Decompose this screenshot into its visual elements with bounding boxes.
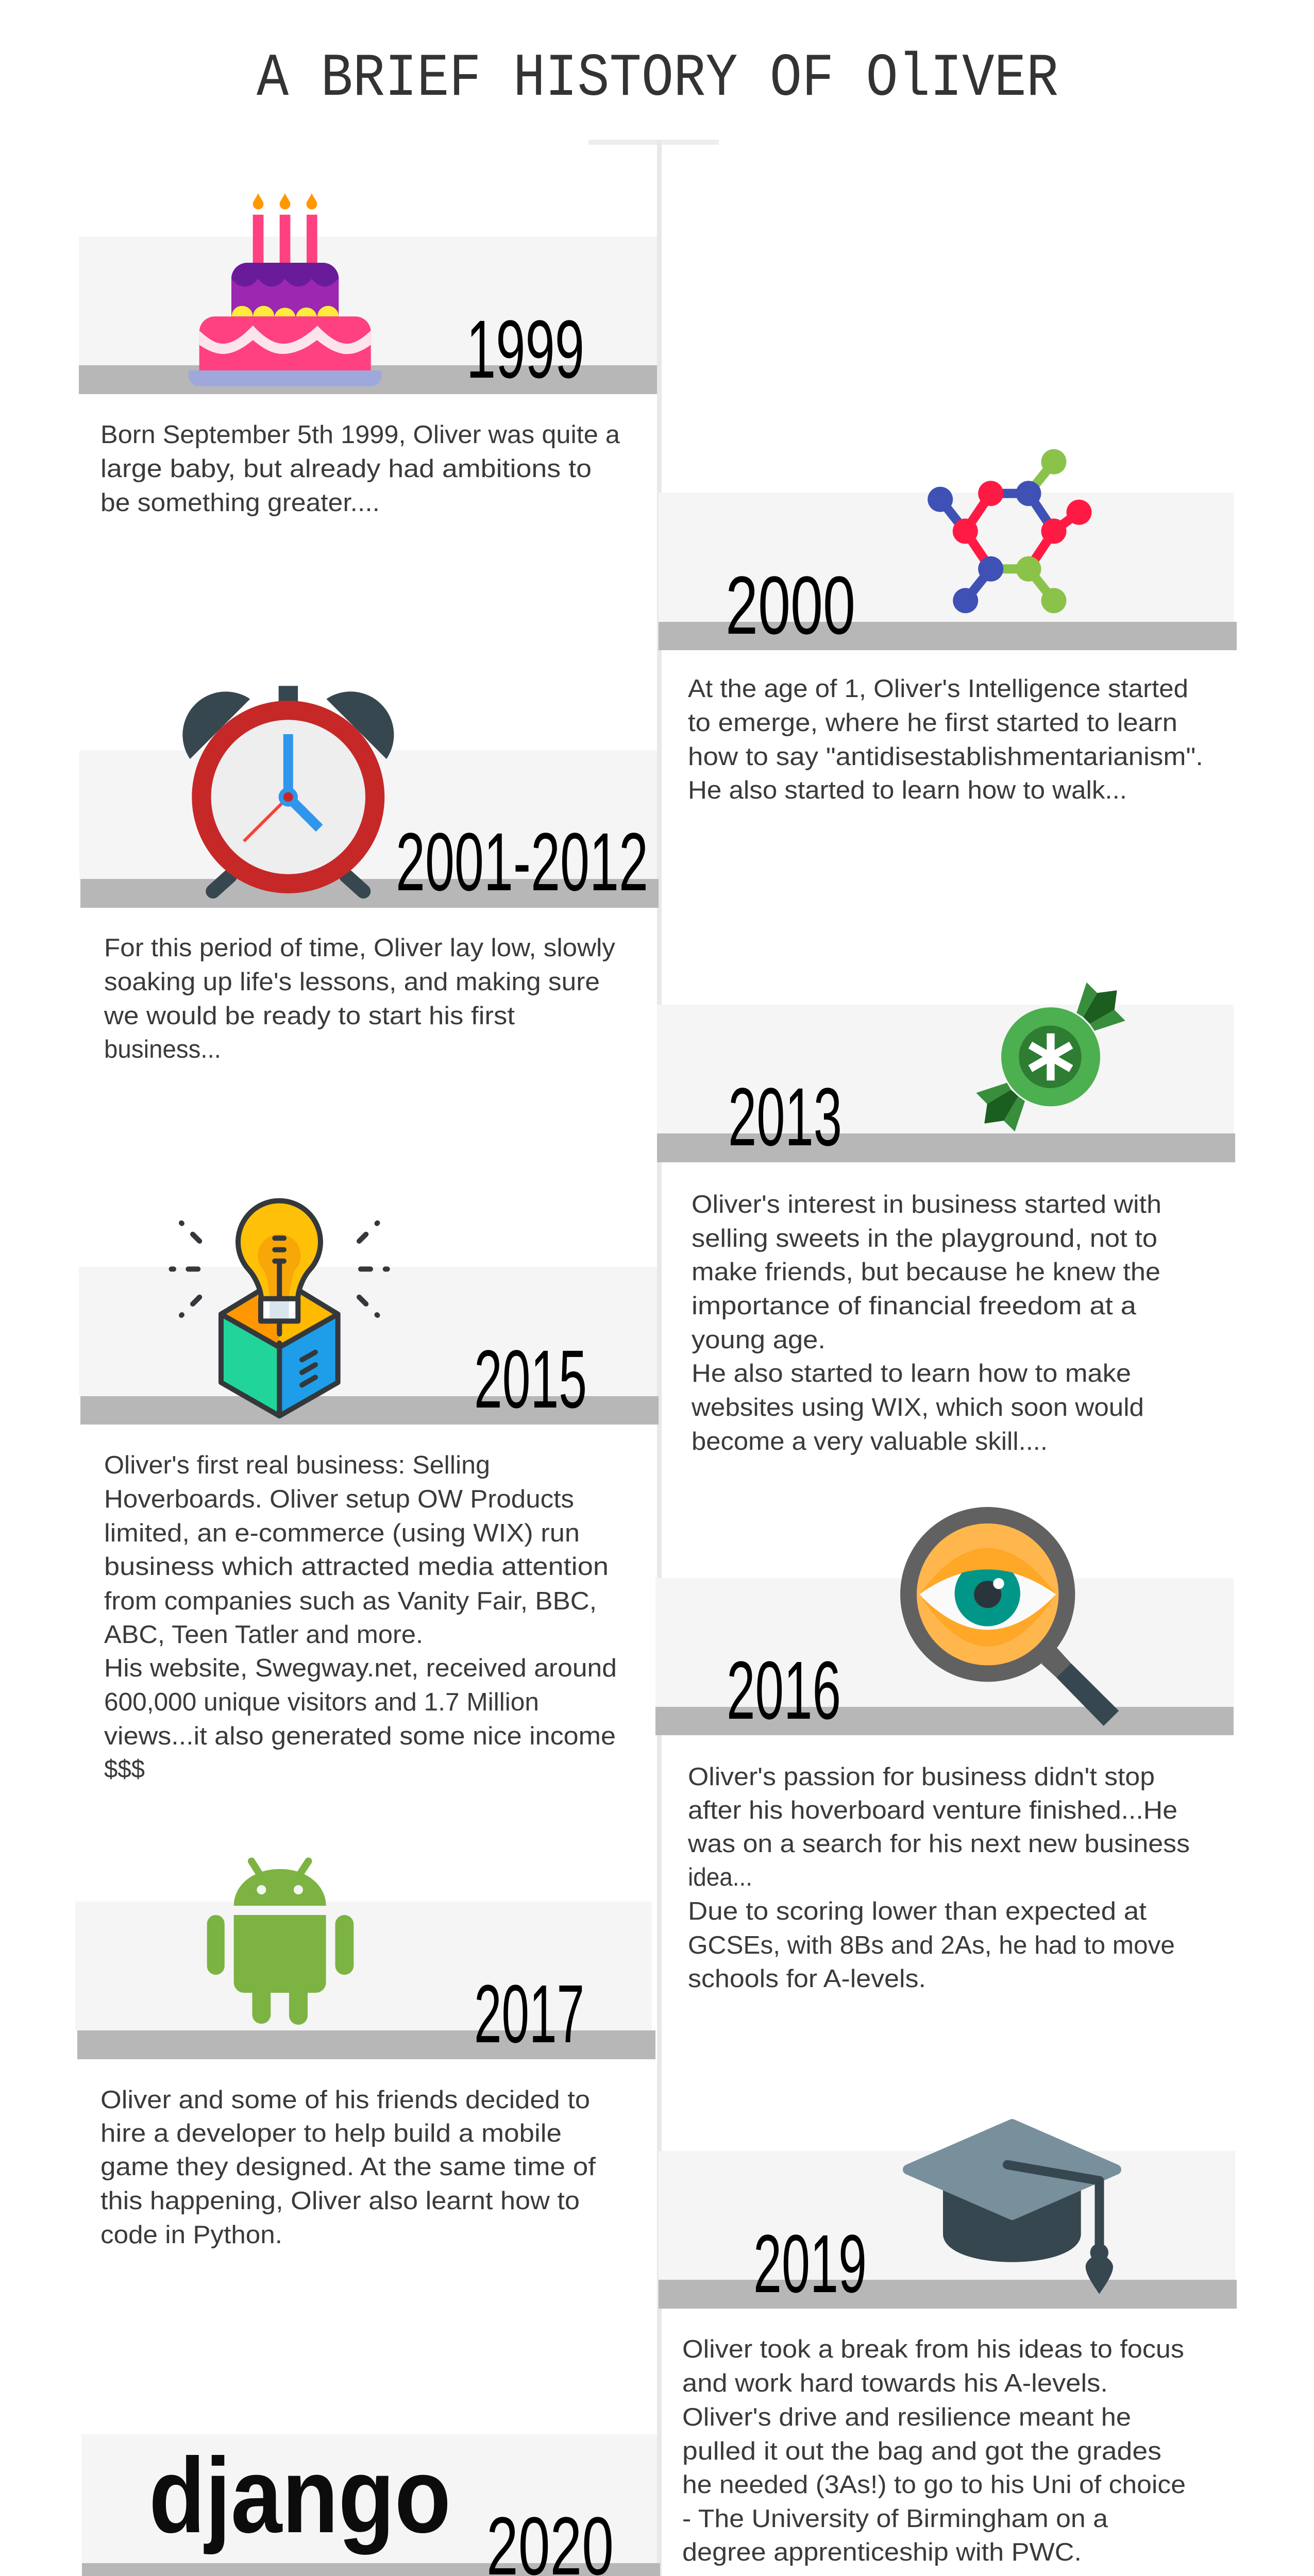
text: 2019: and work hard towards his A-levels. bbox=[682, 2369, 1108, 2397]
text: 2013 bbox=[691, 1191, 1161, 1455]
year: 2015: 2015 bbox=[474, 1333, 587, 1425]
text: 2015: from companies such as Vanity Fair, BBC, bbox=[104, 1587, 597, 1615]
text: 2019: Oliver's drive and resilience meant he bbox=[682, 2403, 1131, 2431]
year: 1999: 1999 bbox=[466, 303, 584, 395]
text: 2001-2012: soaking up life's lessons, and making sure bbox=[104, 968, 600, 996]
icon: graduation cap bbox=[908, 2124, 1116, 2294]
icon: magnifying glass with eye bbox=[900, 1507, 1119, 1726]
icon: light bulb in a box bbox=[171, 1201, 388, 1416]
text: 2015: Oliver's first real business: Selling bbox=[104, 1451, 490, 1479]
text: 2013: young age. bbox=[692, 1326, 826, 1354]
panel: 1999 bbox=[79, 193, 657, 395]
panel: 2017 bbox=[75, 1861, 655, 2060]
text: 2019: he needed (3As!) to go to his Uni of choice bbox=[682, 2471, 1186, 2499]
text: 2017: hire a developer to help build a mobile bbox=[100, 2120, 562, 2147]
text: 2016 bbox=[687, 1763, 1190, 1993]
text: 2019: Oliver took a break from his ideas to focus bbox=[682, 2335, 1184, 2363]
text: 2001-2012: For this period of time, Oliver lay low, slowly bbox=[104, 934, 616, 962]
text: 2000 bbox=[688, 675, 1203, 804]
text: 2019: pulled it out the bag and got the grades bbox=[682, 2437, 1161, 2465]
text: 1999: be something greater.... bbox=[100, 489, 380, 517]
text: 2015: Hoverboards. Oliver setup OW Products bbox=[104, 1485, 574, 1513]
text: 2013: importance of financial freedom at a bbox=[692, 1292, 1137, 1320]
text: 2013: selling sweets in the playground, not to bbox=[692, 1225, 1157, 1252]
text: 2000: to emerge, where he first started to learn bbox=[688, 709, 1177, 737]
text: 2013: websites using WIX, which soon would bbox=[691, 1394, 1144, 1421]
panel: 2019 bbox=[659, 2124, 1237, 2310]
panel: 2001-2012 bbox=[79, 686, 659, 908]
text: 2016: after his hoverboard venture finished...He bbox=[688, 1797, 1177, 1824]
text: 2016: idea... bbox=[688, 1863, 752, 1891]
text: 2016: was on a search for his next new business bbox=[687, 1830, 1190, 1858]
text: 2015: views...it also generated some nice income bbox=[104, 1722, 616, 1750]
text: 2016: Due to scoring lower than expected at bbox=[688, 1897, 1147, 1925]
icon: birthday cake bbox=[189, 193, 381, 386]
year: 2016: 2016 bbox=[727, 1644, 841, 1736]
year: 2017: 2017 bbox=[474, 1968, 584, 2060]
text: 2016: Oliver's passion for business didn't stop bbox=[688, 1763, 1155, 1791]
text: 2015: His website, Swegway.net, received around bbox=[104, 1654, 617, 1682]
text: 1999: large baby, but already had ambitions to bbox=[100, 455, 592, 483]
text: 2017: code in Python. bbox=[100, 2221, 282, 2249]
text: 2015: $$$ bbox=[104, 1755, 145, 1783]
text: 2016: GCSEs, with 8Bs and 2As, he had to move bbox=[688, 1931, 1175, 1959]
text: 2017 bbox=[100, 2086, 596, 2249]
text: 2001-2012 bbox=[104, 934, 616, 1063]
text: 2019 bbox=[682, 2335, 1186, 2566]
icon: android robot bbox=[207, 1861, 353, 2025]
text: 2017: game they designed. At the same time of bbox=[100, 2153, 596, 2181]
text: 1999: Born September 5th 1999, Oliver was quite a bbox=[100, 421, 620, 449]
icon: molecule bbox=[928, 449, 1091, 613]
panel: 2020 bbox=[81, 2434, 660, 2576]
text: 2013: become a very valuable skill.... bbox=[692, 1428, 1048, 1455]
text: 2015: ABC, Teen Tatler and more. bbox=[104, 1621, 423, 1649]
text: 2019: - The University of Birmingham on a bbox=[682, 2505, 1108, 2533]
text: 2017: Oliver and some of his friends decided to bbox=[100, 2086, 590, 2114]
text: 2016: schools for A-levels. bbox=[688, 1965, 926, 1993]
title: A BRIEF HISTORY OF OlIVER bbox=[257, 45, 1058, 113]
text: 2015 bbox=[104, 1451, 617, 1783]
text: 2013: make friends, but because he knew the bbox=[692, 1258, 1160, 1286]
text: 2017: this happening, Oliver also learnt how to bbox=[100, 2187, 580, 2215]
text: 2001-2012: we would be ready to start his first bbox=[104, 1002, 515, 1030]
icon: alarm clock bbox=[182, 686, 394, 893]
year: 2019: 2019 bbox=[753, 2217, 867, 2310]
timeline spine bbox=[588, 140, 719, 2576]
text: 2019: degree apprenticeship with PWC. bbox=[682, 2538, 1082, 2566]
text: 2015: 600,000 unique visitors and 1.7 Million bbox=[104, 1688, 539, 1716]
year: 2000: 2000 bbox=[726, 559, 855, 651]
text: 2001-2012: business... bbox=[104, 1036, 221, 1063]
text: 2015: limited, an e-commerce (using WIX) run bbox=[104, 1519, 580, 1547]
text: 2013: He also started to learn how to make bbox=[692, 1360, 1131, 1387]
text: 2000: At the age of 1, Oliver's Intelligence started bbox=[688, 675, 1188, 703]
year: 2001-2012: 2001-2012 bbox=[396, 816, 648, 908]
text: 2013: Oliver's interest in business started with bbox=[692, 1191, 1161, 1218]
icon: wrapped sweet bbox=[976, 982, 1125, 1131]
panel: 2015 bbox=[79, 1201, 659, 1425]
panel: 2013 bbox=[657, 982, 1235, 1163]
text: 2000: He also started to learn how to walk... bbox=[688, 776, 1127, 804]
text: 2015: business which attracted media attention bbox=[104, 1553, 609, 1581]
panel: 2016 bbox=[655, 1507, 1234, 1736]
year: 2013: 2013 bbox=[728, 1071, 842, 1163]
panel: 2000 bbox=[659, 449, 1237, 651]
logo: django: django bbox=[149, 2436, 451, 2555]
text: 2000: how to say "antidisestablishmentarianism". bbox=[688, 743, 1203, 771]
text: 1999 bbox=[100, 421, 620, 517]
